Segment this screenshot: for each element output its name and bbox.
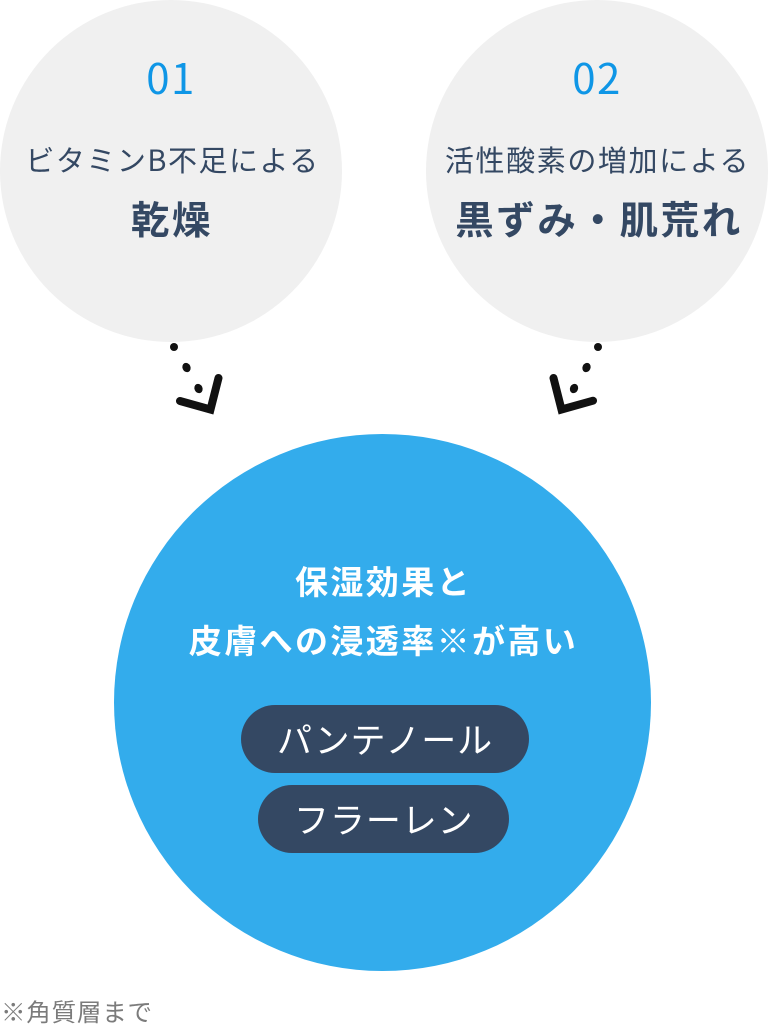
arrow: left dotted arrow: [170, 343, 222, 414]
text: cause vitamin B deficiency: ビタミンB不足による: [25, 138, 320, 180]
heading: moisturizing effect line 2: 皮膚への浸透率※が高い: [189, 615, 578, 663]
footnote: ※角質層まで: [1, 994, 153, 1029]
pill: fullerene: フラーレン: [294, 793, 474, 844]
panel: circle 02 dullness: [426, 0, 768, 342]
pill: panthenol: パンテノール: [277, 712, 493, 764]
heading: dryness: 乾燥: [131, 190, 213, 246]
text: cause active oxygen: 活性酸素の増加による: [445, 138, 750, 180]
number 02: 02: [572, 46, 622, 107]
number 01: 01: [146, 46, 196, 107]
pill: panthenol: [241, 704, 529, 772]
panel: circle 01 dry skin: [0, 0, 342, 342]
heading: moisturizing effect line 1: 保湿効果と: [295, 556, 472, 604]
arrow: right dotted arrow: [550, 343, 602, 414]
panel: large blue circle: [114, 434, 651, 971]
pill: fullerene: [258, 785, 509, 853]
heading: dullness and rough skin: 黒ずみ・肌荒れ: [455, 190, 743, 246]
